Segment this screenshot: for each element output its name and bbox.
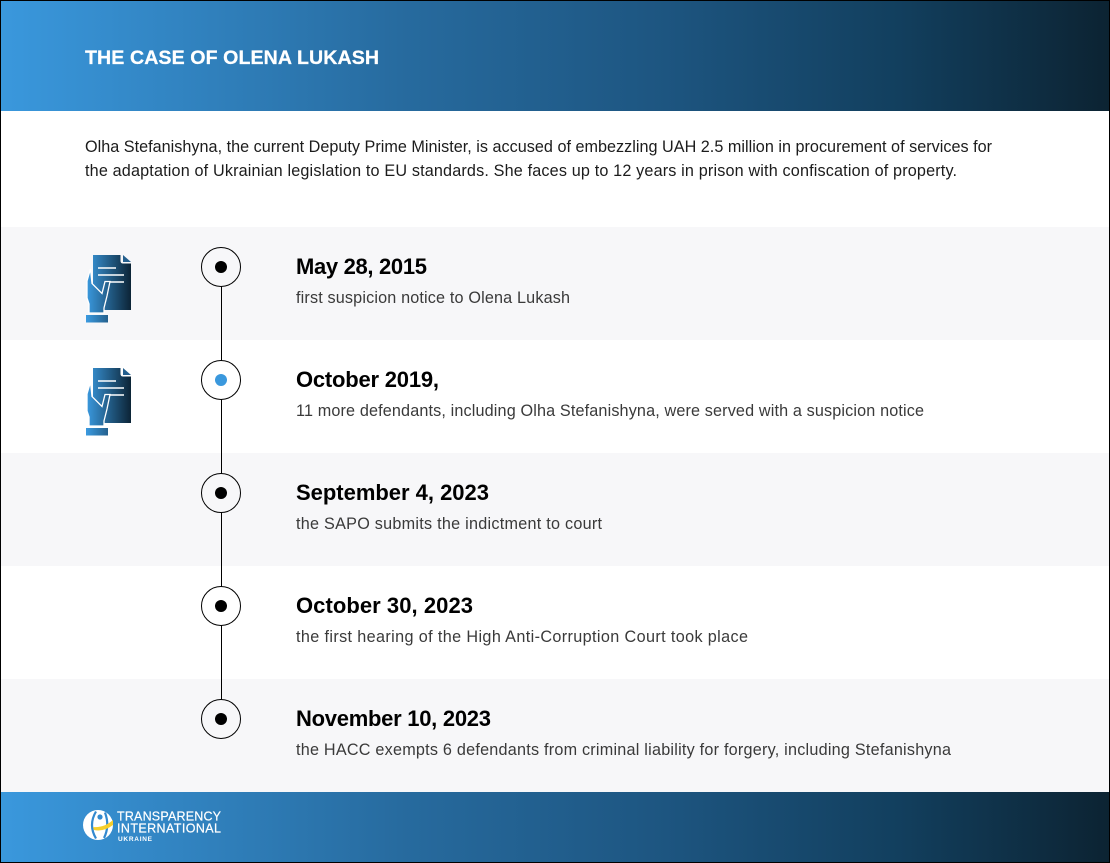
icon: document in hand: [86, 255, 131, 322]
intro text: [85, 138, 993, 180]
date: September 4, 2023: [296, 480, 489, 505]
logo wordmark: UKRAINE: [118, 836, 153, 843]
timeline node: [202, 360, 240, 400]
intro text: Olha Stefanishyna, the current Deputy Prime Minister, is accused of embezzling UAH 2.5 million in procurement of services for: [85, 138, 993, 156]
logo wordmark: INTERNATIONAL: [117, 822, 221, 836]
timeline node: [202, 586, 240, 626]
date: November 10, 2023: [296, 706, 491, 731]
timeline line: [221, 267, 222, 719]
date: October 30, 2023: [296, 593, 473, 618]
description: 11 more defendants, including Olha Stefanishyna, were served with a suspicion notice: [296, 402, 924, 420]
header band: [0, 0, 1110, 111]
icon: logo globe: [83, 810, 113, 840]
logo: Transparency International Ukraine: [83, 810, 222, 843]
row backgrounds: [0, 227, 1110, 792]
timeline entry: October 30, 2023: [202, 586, 748, 646]
logo wordmark: TRANSPARENCY: [117, 810, 222, 824]
timeline entry: November 10, 2023: [202, 700, 951, 759]
timeline entry: September 4, 2023: [202, 474, 602, 533]
timeline node: [202, 700, 240, 738]
date: May 28, 2015: [296, 254, 427, 279]
title: THE CASE OF OLENA LUKASH: [85, 47, 379, 69]
timeline entry: May 28, 2015: [86, 248, 570, 322]
description: the first hearing of the High Anti-Corruption Court took place: [296, 628, 748, 646]
description: first suspicion notice to Olena Lukash: [296, 289, 570, 307]
icon: document in hand: [86, 368, 131, 436]
timeline node: [202, 248, 240, 286]
timeline entry: October 2019: [86, 360, 924, 436]
description: the SAPO submits the indictment to court: [296, 515, 602, 533]
description: the HACC exempts 6 defendants from criminal liability for forgery, including Stefanishyna: [296, 741, 951, 759]
intro text: the adaptation of Ukrainian legislation to EU standards. She faces up to 12 years in prison with confiscation of property.: [85, 162, 957, 180]
timeline node: [202, 474, 240, 512]
logo wordmark: [117, 810, 222, 843]
footer band: [0, 792, 1110, 863]
date: October 2019,: [296, 367, 439, 392]
